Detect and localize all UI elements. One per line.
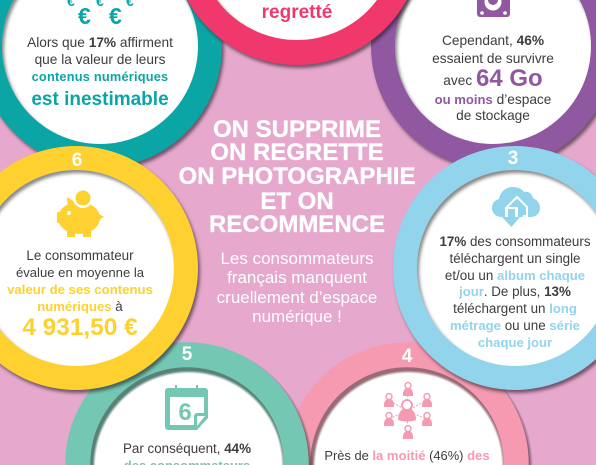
icon: cloud download xyxy=(492,187,540,227)
panel: purple storage: de stockage xyxy=(456,108,530,123)
text: 17% priceless: Alors que 17% affirment xyxy=(27,35,173,50)
panel: yellow value: 4 931,50 € xyxy=(22,314,138,341)
icon: people network xyxy=(384,382,432,439)
panel: blue downloads: téléchargent un long xyxy=(453,301,577,316)
panel: teal priceless content xyxy=(0,0,222,168)
text: average value: Le consommateur xyxy=(26,248,134,263)
panel: yellow value: numériques à xyxy=(37,299,123,314)
step number 3: 3 xyxy=(508,148,518,169)
subtitle: numérique ! xyxy=(252,307,342,326)
panel: blue downloads: chaque jour xyxy=(478,335,552,350)
panel: teal priceless content: contenus numériques xyxy=(32,69,168,84)
icon: euro coins: € xyxy=(78,3,91,29)
subtitle: Les consommateurs xyxy=(220,249,374,268)
panel: red regret xyxy=(172,0,422,65)
text: 44% of consumers: Par conséquent, 44% xyxy=(123,441,251,456)
title: ON SUPPRIME xyxy=(213,116,381,143)
subtitle: français manquent xyxy=(227,268,367,287)
subtitle xyxy=(217,249,377,326)
panel: teal priceless content: est inestimable xyxy=(31,89,169,110)
panel: yellow value: valeur de ses contenus xyxy=(7,282,153,297)
icon: euro coins xyxy=(67,0,134,29)
step number 4: 4 xyxy=(402,346,412,367)
panel: purple storage: avec 64 Go xyxy=(443,65,543,92)
title: ET ON xyxy=(260,188,334,215)
panel: blue downloads: téléchargent un single xyxy=(449,251,581,266)
panel: blue downloads: métrage ou une série xyxy=(450,318,580,333)
panel: yellow value: évalue en moyenne la xyxy=(16,265,144,280)
subtitle: cruellement d’espace xyxy=(217,288,377,307)
title: RECOMMENCE xyxy=(209,211,385,238)
icon: calendar: 6 xyxy=(178,399,192,426)
icon: euro coins: € xyxy=(109,3,122,29)
step number 5: 5 xyxy=(182,344,192,365)
text: regretté: regretté xyxy=(262,2,332,23)
panel: teal priceless content: que la valeur de leurs xyxy=(35,52,165,67)
icon: hard disk xyxy=(477,0,510,17)
panel: yellow value xyxy=(0,146,198,390)
text: half of consumers: Près de la moitié (46%) des xyxy=(324,448,490,463)
title: ON PHOTOGRAPHIE xyxy=(179,163,415,190)
panel: purple storage: essaient de survivre xyxy=(432,51,554,66)
text: 46% with 64 Go: Cependant, 46% xyxy=(442,33,544,48)
panel: purple storage: ou moins d’espace xyxy=(435,92,551,107)
panel: blue downloads xyxy=(393,146,596,390)
panel: blue downloads: jour. De plus, 13% xyxy=(459,284,571,299)
step number 6: 6 xyxy=(72,150,82,171)
panel: blue downloads: et/ou un album chaque xyxy=(445,268,585,283)
icon: calendar xyxy=(165,385,208,430)
icon: piggy bank xyxy=(57,190,104,237)
title: ON REGRETTE xyxy=(210,139,384,166)
title xyxy=(179,116,415,238)
text: download statistics: 17% des consommateurs xyxy=(439,234,591,249)
panel: purple storage xyxy=(371,0,596,168)
panel: pink sharing xyxy=(285,342,535,465)
panel: green consequence xyxy=(65,342,315,465)
